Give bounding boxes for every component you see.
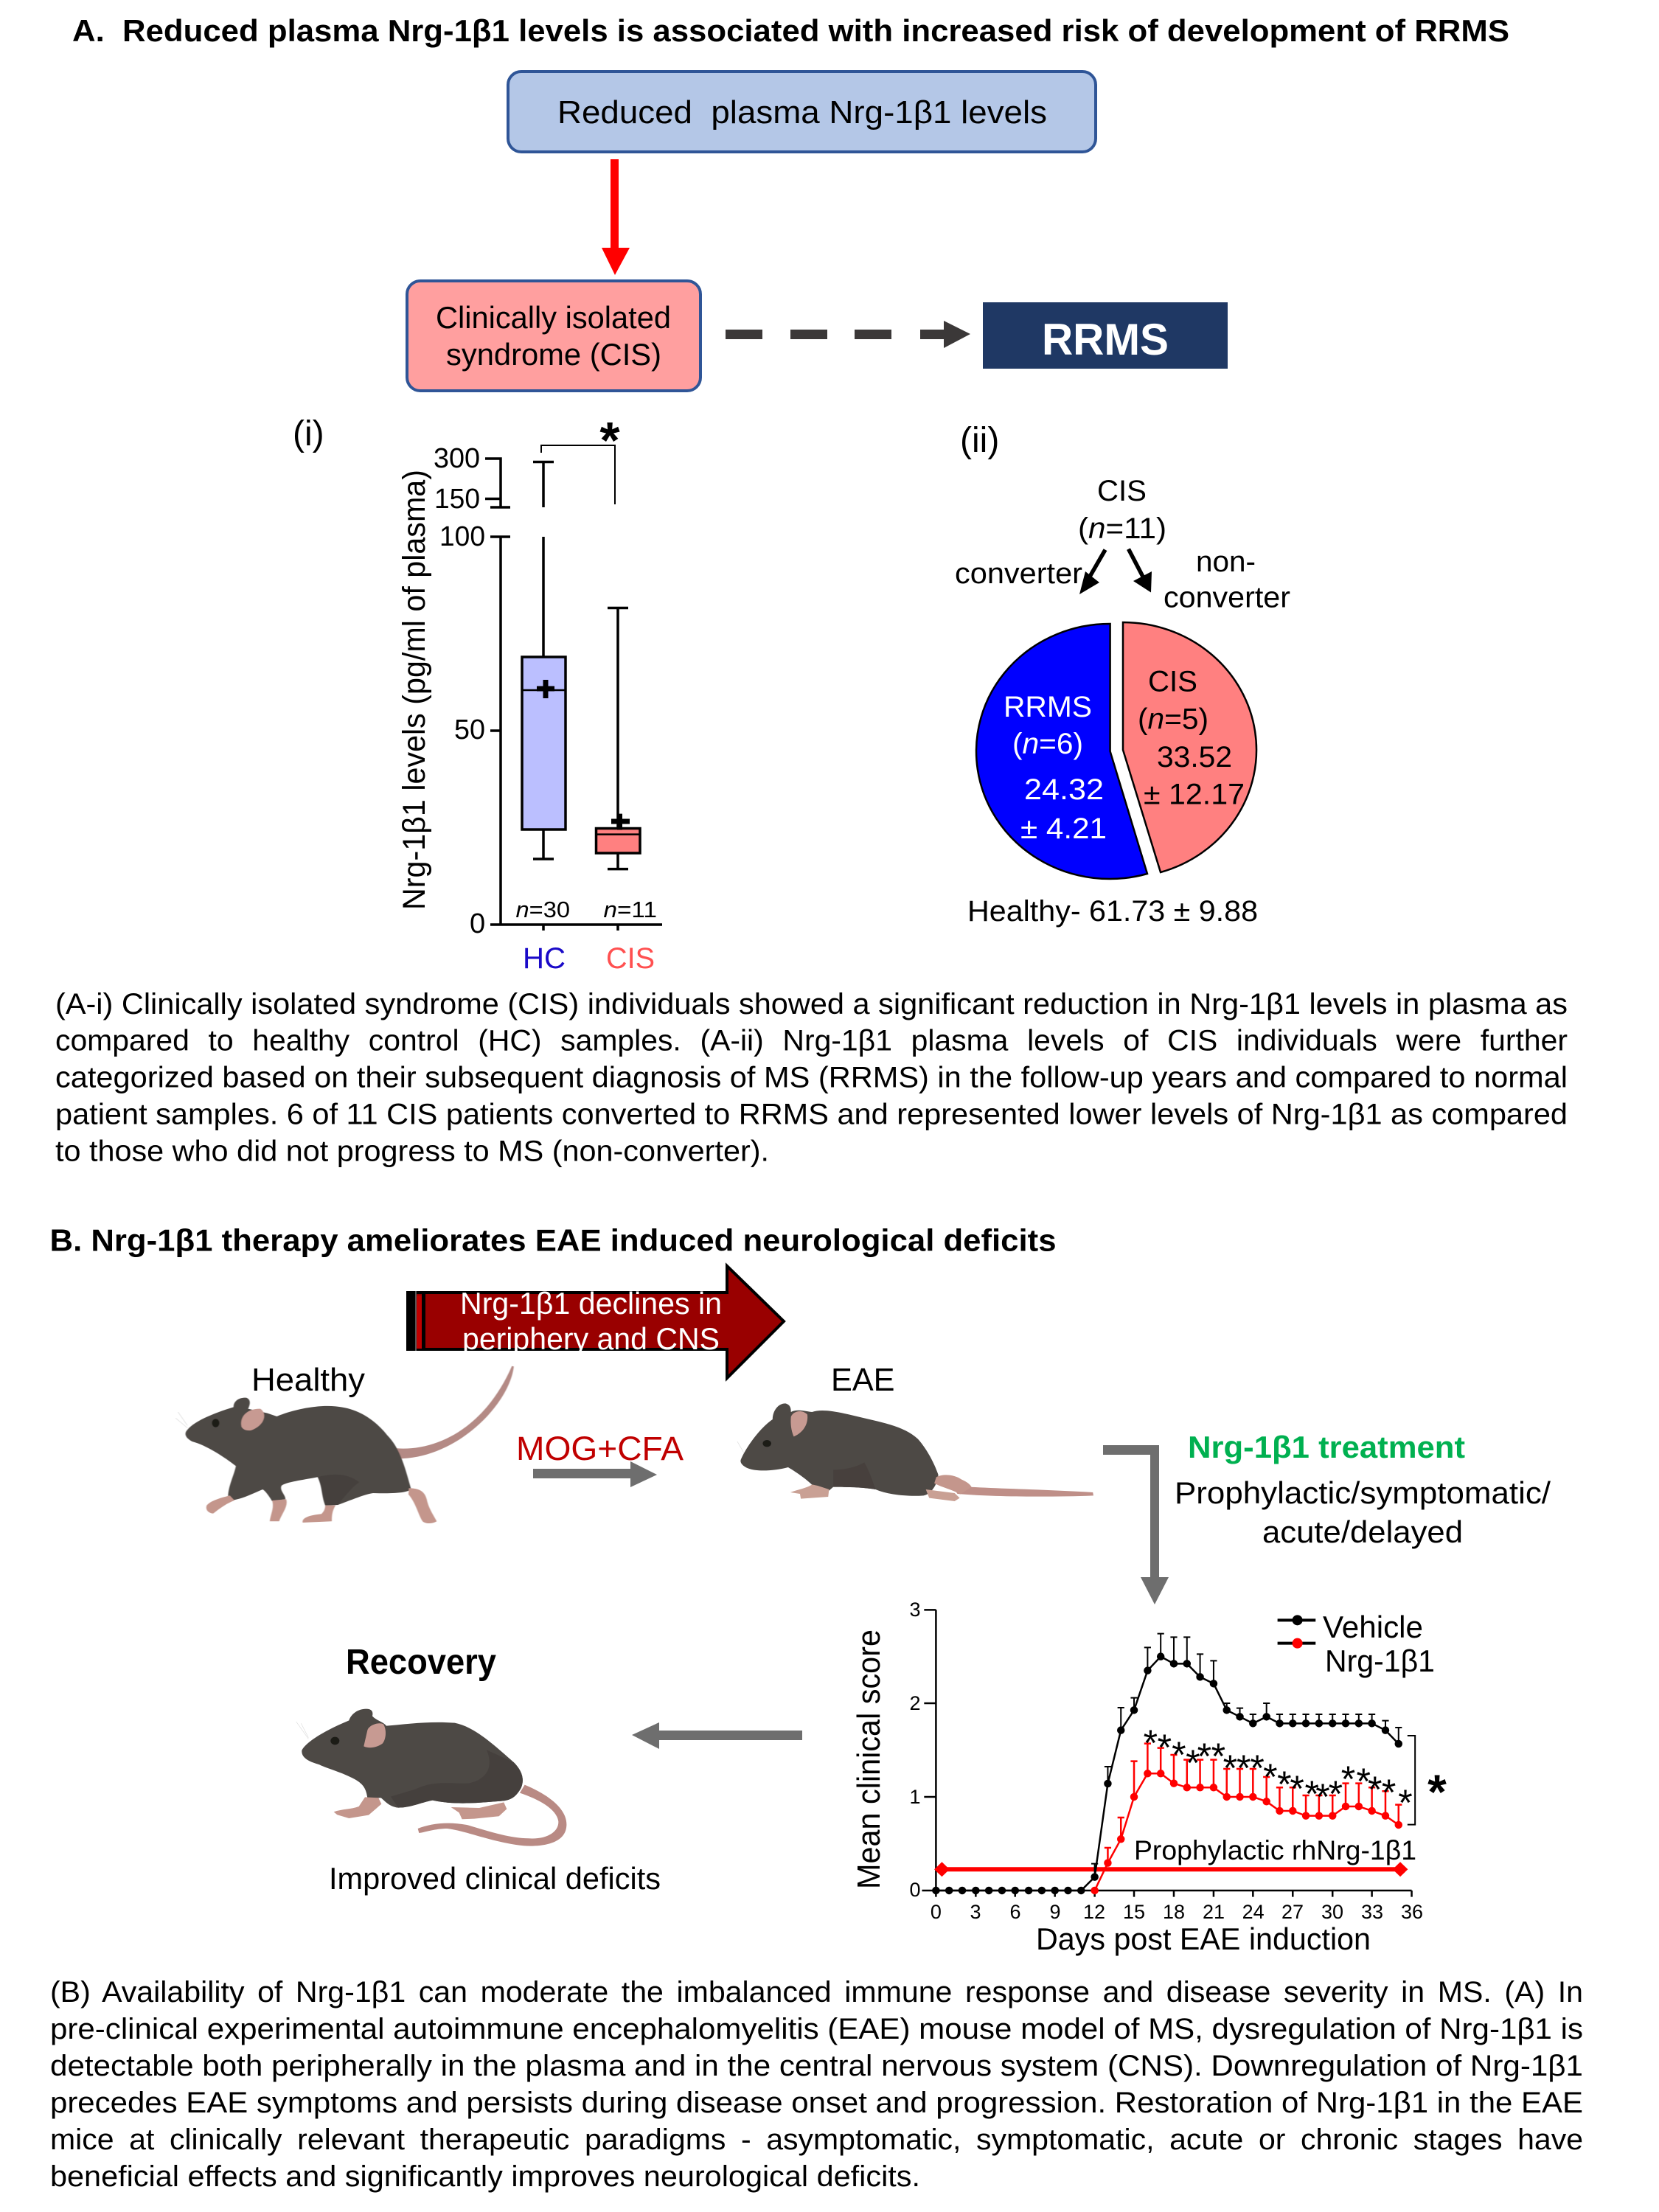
labels: group sizes: n=11 [603,897,657,922]
arrow: grey arrow to recovery [632,1722,802,1749]
heading: section A title: A. Reduced plasma Nrg-1β1 levels is associated with increased risk of development of RRMS [72,13,1509,48]
axis labels: x ticks: 3 [970,1901,981,1923]
axis labels: tick values [434,443,485,939]
axis labels: tick values: 50 [454,714,485,745]
labels: groups [523,942,655,975]
axis labels: tick values: 100 [439,521,485,552]
arrow: Nrg-1β1 declines banner: Nrg-1β1 declines in [460,1286,722,1321]
significance stars: * [1290,1768,1304,1809]
heading: section B title: B. Nrg-1β1 therapy ameliorates EAE induced neurological deficits [50,1223,1056,1258]
text block: caption B: beneficial effects and significantly improves neurological deficits. [50,2160,920,2193]
label: EAE: EAE [831,1362,895,1398]
axis labels: x ticks: 33 [1361,1901,1383,1923]
significance stars: * [1263,1756,1278,1798]
box: clinically isolated syndrome [407,281,700,391]
axis labels: x ticks: 27 [1281,1901,1304,1923]
text block: caption B: mice at clinically relevant therapeutic paradigms - asymptomatic, symptomatic, acute or chronic stages have [50,2124,1583,2156]
axis labels: y ticks: 3 [909,1599,921,1621]
significance bracket [541,411,620,504]
axis title: y axis: Nrg-1β1 levels (pg/ml of plasma) [397,470,432,910]
text block: caption A: compared to healthy control (HC) samples. (A-ii) Nrg-1β1 plasma levels of CIS individuals were further [55,1025,1568,1057]
axis labels: tick values: 300 [434,443,480,474]
text block: caption B: detectable both peripherally in the plasma and in the central nervous system (CNS). Downregulation of Nrg-1β1 [50,2050,1583,2082]
label: panel i: (i) [293,414,324,453]
axis labels: tick values: 0 [470,908,485,939]
axis labels: x ticks: 9 [1049,1901,1061,1923]
significance stars: * [1341,1759,1355,1800]
text block: caption A: patient samples. 6 of 11 CIS patients converted to RRMS and represented lower levels of Nrg-1β1 as compared [55,1099,1568,1131]
box: RRMS [983,302,1228,369]
arrow: grey arrow to EAE [533,1461,657,1487]
text block: Nrg-1β1 treatment: acute/delayed [1262,1514,1463,1549]
significance stars: * [1237,1747,1251,1789]
plot: axes, series and error bars [922,1610,1415,1897]
axis labels: x ticks: 0 [931,1901,942,1923]
significance stars: * [1197,1736,1211,1777]
label: recovery: Recovery [346,1643,496,1682]
axis labels: x ticks: 12 [1083,1901,1105,1923]
pie slice: RRMS: ± 4.21 [1020,813,1107,845]
axis labels: x ticks: 36 [1401,1901,1423,1923]
labels: converter categories: converter [1164,582,1290,614]
axis labels: x ticks: 6 [1009,1901,1021,1923]
significance stars: * [1356,1761,1371,1802]
text block: caption B: precedes EAE symptoms and persists during disease onset and progression. Restoration of Nrg-1β1 in the EAE [50,2087,1583,2119]
significance stars: * [1211,1736,1225,1777]
pie slice: CIS non-converter: CIS [1148,665,1197,698]
label: healthy: Healthy [251,1362,365,1398]
significance stars: * [1223,1747,1237,1789]
significance stars: * [1186,1742,1200,1784]
labels: group sizes [516,897,657,922]
label: improved clinical deficits: Improved clinical deficits [329,1861,661,1896]
chart: box plot of Nrg-1β1 levels [397,411,662,975]
box: HC group [522,462,566,859]
significance stars: * [1144,1722,1158,1764]
significance stars: * [1158,1727,1172,1768]
icon: recovery mouse [296,1709,566,1846]
significance stars: * [1368,1769,1382,1810]
pie slice: RRMS [976,624,1147,879]
significance stars: * [1398,1782,1413,1823]
significance stars: * [1250,1747,1265,1789]
text block: caption A: to those who did not progress to MS (non-converter). [55,1135,769,1168]
box: RRMS: RRMS [1042,315,1169,364]
box: reduced plasma levels [508,72,1096,152]
icon: EAE mouse [737,1403,1093,1501]
significance stars: * [1277,1764,1292,1805]
chart: clinical score line chart [851,1599,1447,1956]
axis labels: x ticks: 18 [1163,1901,1185,1923]
labels: CIS group header: CIS [1097,475,1147,507]
legend labels [1323,1610,1435,1678]
labels: groups: CIS [606,942,655,975]
significance stars [1144,1722,1447,1823]
legend labels: Nrg-1β1 [1325,1644,1435,1678]
box: CIS group [596,608,640,869]
text block: caption B: (B) Availability of Nrg-1β1 can moderate the imbalanced immune response and disease severity in MS. (A) In [50,1976,1583,2008]
significance bracket: * [599,411,620,469]
label: healthy mean: Healthy- 61.73 ± 9.88 [967,895,1258,928]
pie slice: CIS non-converter: ± 12.17 [1144,779,1245,811]
text block: Nrg-1β1 treatment: Prophylactic/symptomatic/ [1175,1475,1551,1510]
labels: converter categories: converter [955,557,1082,590]
pie slice: RRMS: 24.32 [1024,773,1104,806]
axis labels: x ticks: 21 [1203,1901,1225,1923]
chart: CIS converter pie [955,475,1290,928]
significance stars: * [1427,1764,1447,1819]
arrows: converter and non-converter [1079,549,1152,594]
axis labels: x ticks [931,1901,1423,1923]
axis labels: y ticks [909,1599,921,1901]
box: clinically isolated syndrome: syndrome (CIS) [446,337,661,372]
pie slice: RRMS: RRMS [1004,691,1092,723]
axis title: mean clinical score: Mean clinical score [851,1630,887,1889]
significance stars: * [1304,1773,1319,1815]
arrow: treatment bent arrow [1103,1445,1169,1604]
axis labels: y ticks: 0 [909,1879,921,1901]
labels: groups: HC [523,942,566,975]
pie slice: RRMS: (n=6) [1012,728,1083,760]
text block: caption A [55,988,1568,1168]
axis labels: y ticks: 2 [909,1692,921,1714]
icon: healthy mouse [175,1366,514,1523]
arrow: Nrg-1β1 declines banner: periphery and CNS [462,1321,720,1356]
significance stars: * [1329,1773,1343,1815]
labels: CIS group header [1078,475,1166,545]
significance stars: * [1315,1776,1330,1818]
box: clinically isolated syndrome: Clinically isolated [436,300,671,335]
axis title: days post EAE induction: Days post EAE induction [1036,1921,1371,1956]
significance stars: * [1172,1734,1186,1775]
label: prophylactic treatment window: Prophylactic rhNrg-1β1 [1134,1835,1416,1865]
significance stars: * [1382,1772,1396,1813]
axis labels: y ticks: 1 [909,1786,921,1808]
text block: Nrg-1β1 treatment: Nrg-1β1 treatment [1188,1430,1465,1464]
text block: caption A: categorized based on their subsequent diagnosis of MS (RRMS) in the follow-up years and compared to normal [55,1062,1568,1094]
axis labels: x ticks: 24 [1242,1901,1265,1923]
text block: caption B: pre-clinical experimental autoimmune encephalomyelitis (EAE) mouse model of MS, dysregulation of Nrg-1β1 is [50,2013,1583,2045]
labels: converter categories: non- [1196,546,1256,578]
arrow: Nrg-1β1 declines banner [408,1266,784,1378]
label: MOG+CFA: MOG+CFA [516,1430,684,1467]
arrow: dashed arrow to RRMS [726,321,970,348]
axis labels: x ticks: 15 [1123,1901,1145,1923]
arrow: red downward arrow [602,159,630,275]
axis labels: x ticks: 30 [1321,1901,1343,1923]
labels: CIS group header: (n=11) [1078,512,1166,545]
labels: converter categories [955,546,1290,614]
axis labels: tick values: 150 [434,484,480,515]
text block: caption B [50,1976,1583,2193]
axis: y and x axes with ticks [485,459,662,931]
pie slice: CIS non-converter [1123,622,1256,872]
labels: group sizes: n=30 [516,897,570,922]
legend labels: Vehicle [1323,1610,1423,1644]
text block: Nrg-1β1 treatment [1175,1430,1551,1549]
box: reduced plasma levels: Reduced plasma Nrg-1β1 levels [557,94,1047,131]
label: panel ii: (ii) [960,421,999,460]
pie slice: CIS non-converter: (n=5) [1138,703,1208,736]
pie slice: CIS non-converter: 33.52 [1157,741,1232,773]
text block: caption A: (A-i) Clinically isolated syndrome (CIS) individuals showed a significant reduction in Nrg-1β1 levels in plasma as [55,988,1568,1020]
